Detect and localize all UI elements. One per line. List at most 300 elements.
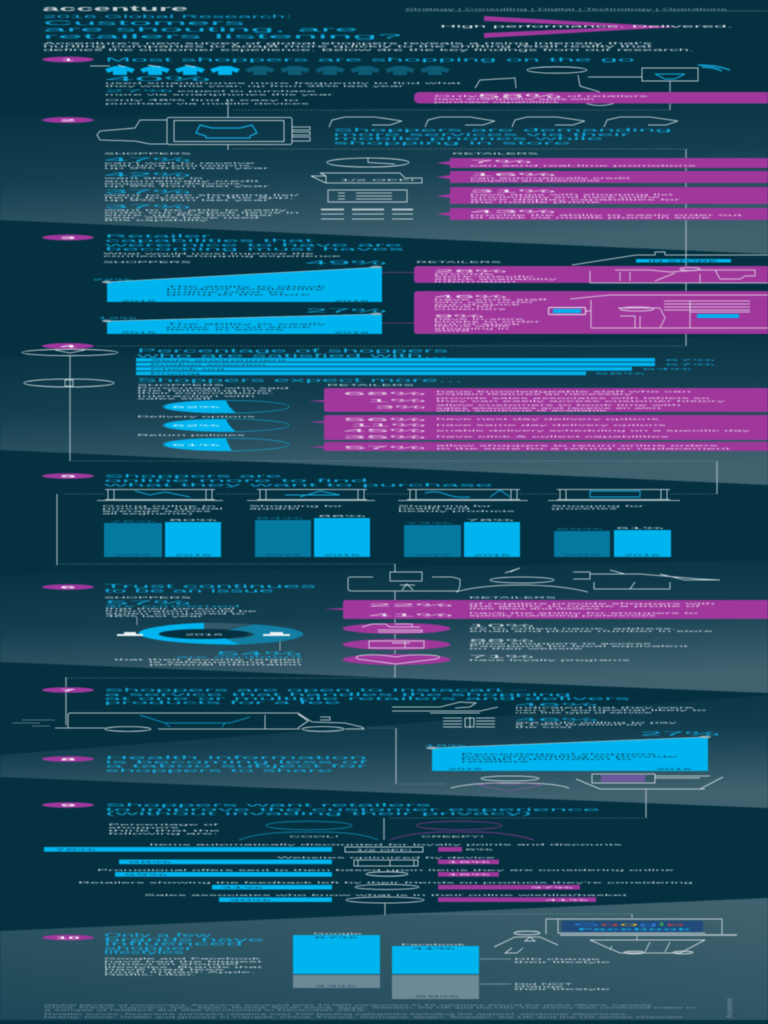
panel: section 9 [42, 802, 697, 903]
callout: delivery capability: have next day delivery options [436, 417, 662, 421]
callout: returns capability [308, 442, 768, 451]
column labels: SHOPPERS [137, 383, 225, 387]
chart row: promotional offers [97, 868, 678, 877]
chart row: friends feedback [78, 880, 697, 890]
icon: clock [327, 158, 409, 167]
heading 9: (without invading their privacy) [105, 811, 536, 816]
badge 3: 3 [60, 235, 81, 240]
intro text 9: following are: [108, 832, 219, 836]
heading 4b: Shoppers expect more... [137, 378, 466, 384]
callout: staff capability: sales associates and receive an alert [436, 406, 662, 410]
callout: staff and kiosks: 46% [434, 294, 507, 299]
chart: health information: 18% [424, 744, 468, 748]
subheading 3: connected shopping experience [103, 254, 344, 258]
chart row: discounts: Items automatically discounted for loyalty points and discounts [149, 842, 627, 846]
callout: staff capability: 68% [343, 391, 432, 397]
bar chart: google: 33% [314, 984, 360, 988]
chart: health information: who are willing to provide [461, 754, 681, 758]
callout: staff capability: allow customers to book time with [436, 403, 684, 407]
title block: 2016 Global Research: [43, 14, 292, 19]
shopper expectation intro: Return policies [137, 433, 249, 437]
chart: health information: health information to [461, 757, 635, 761]
heading 4a: who are satisfied with... [137, 353, 448, 359]
callout: staff and kiosks: out-of-stock [434, 302, 524, 306]
bar chart: online purchases: 2016 [175, 554, 215, 557]
chart row: sales associates [144, 893, 629, 903]
callout: staff and kiosks: out-of-stock [434, 322, 524, 326]
stats 7: are only willing to pay [515, 720, 681, 724]
callout: delivery capability: 35% [343, 434, 432, 440]
bar chart: satisfaction: 58% [595, 372, 648, 376]
callout: staff capability: have knowledgeable staff who can [436, 389, 695, 393]
shopper stats 2: want to be able to easily [104, 208, 292, 212]
callout: delivery capability: enable delivery scheduling on a specific day [436, 428, 753, 432]
stats: shoppers on mobile: expect to purchase [177, 89, 319, 93]
icon: dollar coins [443, 717, 495, 728]
bar chart: satisfaction: 67% [665, 362, 718, 366]
shopper stats 2: 47% [104, 158, 196, 164]
shopper concern stat: 48% last year [105, 614, 204, 618]
shopper stats 2: coupons and discounts, [104, 182, 245, 186]
heading 5: online more to find [104, 478, 370, 484]
chart: order out of stock: 27% [305, 308, 391, 314]
shopper stats 2: can't wait to receive [104, 161, 259, 165]
shopper stats 2: this capability [104, 218, 213, 222]
subheading 3 [103, 252, 344, 258]
callouts: retailer capabilities: can automatically credit [470, 176, 632, 180]
chart row: sales associates: 41% [545, 898, 592, 902]
chart row: discounts: 6% [465, 848, 497, 852]
shopper expectation intro: the following met [137, 388, 274, 392]
callout: staff and kiosks: have store staff [434, 297, 549, 301]
footer notes: a sample of retailers and was conducted in December 2015. [44, 1008, 368, 1012]
legend: lifestyle labels: change [514, 984, 565, 988]
chart: order out of stock: 2016 [334, 332, 373, 334]
stats: shoppers on mobile: purchase via mobile devices [105, 102, 312, 106]
callout: retailer smartphone apps: Only [434, 94, 482, 98]
intro text: defines the customer experience. Below are the key findings from our research. [43, 48, 694, 52]
bar chart: online purchases: 88% [318, 514, 369, 518]
heading 10: lifestyles [104, 950, 186, 956]
bar chart: online purchases: 2015 [414, 554, 454, 557]
shopper stats 2: 37% [104, 204, 196, 210]
icon: half-off tag: 1/2 OFF! [340, 178, 416, 182]
icon: person with heart [451, 776, 569, 791]
badge 8: 8 [60, 756, 81, 762]
callouts: retailer capabilities: 31% [470, 188, 556, 194]
panel: section 10 [42, 919, 737, 1019]
callout: store-specific availability: store-specific [434, 274, 539, 278]
heading 8 [105, 755, 371, 774]
shopper expectation intro: Percentage who said [137, 386, 292, 390]
stats 7: 46% [515, 702, 598, 707]
chart row: friends feedback: 37% [530, 885, 577, 889]
stats: shoppers on mobile: more via smartphones this year [105, 92, 333, 96]
shopper stats 2: 42% [104, 172, 196, 178]
chart row: websites [119, 856, 499, 866]
stats: shoppers on mobile: 40% [105, 76, 213, 83]
body text 10: have had the biggest [104, 960, 264, 964]
callouts: retailer capabilities: functionality and have online [470, 195, 663, 199]
shopper confidence stat [114, 652, 306, 666]
bar chart: google: Google [313, 932, 364, 936]
chart row: websites: 16% [447, 860, 494, 864]
body text 10: Google and Facebook [104, 956, 264, 960]
chart row: discounts: 78% [54, 848, 100, 852]
callout: staff capability: 3% [375, 404, 431, 410]
badge 9 [42, 802, 94, 808]
retailer stats 6: 10% [469, 623, 536, 628]
chart row: promotional offers: 16% [447, 872, 494, 876]
heading 2: mobile phones while [333, 136, 605, 142]
service lines: Strategy | Consulting | Digital | Technology | Operations [405, 8, 728, 12]
legend: lifestyle labels: their lifestyle [514, 960, 613, 964]
body text 10: much impact: Apple, [104, 970, 257, 974]
subheading 3: What would most improve the [103, 252, 317, 256]
callouts: retailer capabilities: of stock via mobile phone in store [470, 216, 713, 220]
body text 10 [104, 956, 264, 976]
stats: shoppers on mobile: Only 48% find it easy to [105, 98, 302, 102]
legend: lifestyle labels: DID change [514, 957, 603, 961]
column labels [103, 260, 501, 264]
labels 5: Shopping for [249, 504, 344, 508]
callout: store-specific availability [414, 266, 768, 284]
chart: delivery pie [163, 419, 289, 432]
heading 9 [105, 802, 604, 816]
bar chart: online purchases: 76% [109, 520, 159, 524]
retailer stats 6: 88% [469, 638, 536, 643]
shopper confidence stat: that their favorite retailer [114, 658, 303, 662]
icon: loyalty heart oval [342, 654, 450, 665]
shopper expectation intro: sales staff [137, 396, 213, 400]
icon: laptop with brands [546, 919, 737, 940]
heading 5: what they want to purchase [104, 482, 495, 488]
callout: staff and kiosks: 9% [434, 314, 484, 318]
bar chart: online purchases: 2016 [624, 554, 664, 557]
chart: check availability online: product availability [166, 287, 328, 291]
column labels [104, 152, 538, 156]
icon: delivery truck [12, 713, 364, 731]
bar chart: google [293, 932, 380, 988]
labels 5: health and [398, 506, 473, 510]
labels 5: Going online to [102, 504, 220, 508]
chart row: websites: 58% [128, 860, 175, 864]
callout: retailer smartphone apps: purchase capabilities [434, 100, 562, 104]
badge 10: 10 [56, 935, 84, 940]
bar chart: online purchases: 78% [466, 518, 517, 522]
chart row: sales associates: 30% [228, 898, 275, 902]
callout: staff and kiosks [414, 291, 768, 334]
footer notes [44, 1003, 697, 1019]
body text 10: lifestyles. Brands that [104, 965, 264, 969]
chart: staff pie: 62% [172, 405, 223, 409]
heading 7: at one or multiple retailers and delivers [104, 696, 636, 701]
icon: half-off tag [311, 173, 422, 183]
heading 10: shopper [104, 946, 195, 952]
shopper confidence stat: 54% [216, 652, 303, 658]
shopper stats 2: up 9% from last year [104, 166, 270, 170]
icon: four hands [329, 117, 678, 127]
chart: health information: retailers [461, 760, 533, 764]
callout: store-specific availability: 28% [434, 268, 507, 274]
chart: staff pie [163, 400, 289, 413]
callout: retailer profile ability: their likes and dislikes [469, 606, 604, 610]
callout: retailer smartphone apps: 58% [477, 94, 563, 100]
title block [43, 14, 405, 40]
badge 2: 2 [60, 118, 81, 122]
labels 5: Shopping for [398, 504, 493, 508]
chart: health information [424, 732, 724, 771]
chart row: promotional offers: 59% [124, 872, 171, 876]
stats: shoppers on mobile: they want this year, up from 36% last year [105, 84, 404, 88]
icon: laptop with brands: Facebook [578, 928, 691, 932]
badge 1 [42, 56, 94, 62]
intro text: hurtling companies to adapt more quickly to the shifting retail reality that [43, 44, 652, 48]
chart: order out of stock: The ability to easily [166, 322, 330, 326]
header bar [42, 6, 768, 13]
callout: retailer profile ability: specify marketing preferences [469, 614, 660, 618]
icon: cool person [239, 821, 378, 840]
callout: staff capability: provide sales associates with tablets so [436, 396, 713, 400]
chart: order out of stock: 12% [97, 316, 139, 320]
heading 6: Trust continues [104, 584, 319, 590]
badge 5 [42, 473, 94, 479]
callout: staff and kiosks: have in-store [434, 317, 527, 321]
icon: shirts pictogram [90, 65, 450, 75]
shopper expectation intro: their expectations: [137, 391, 276, 395]
callout: staff and kiosks: who can order [434, 300, 535, 304]
icon: in-store shopper [572, 252, 768, 283]
badge 4 [42, 343, 94, 349]
panel: section 3 [42, 234, 768, 334]
chart: trust donut: 2016 [185, 632, 226, 636]
stats: shoppers on mobile: used smartphones more frequently to find what [105, 81, 462, 85]
shopper stats 2: up 9% from last year [104, 198, 270, 202]
bar chart: online purchases: 2015 [564, 554, 604, 557]
tagline: High performance. Delivered. [440, 24, 733, 28]
stats 7: very or somewhat likely to [515, 708, 710, 712]
shopper concern stat: 57% [105, 600, 192, 606]
heading 1: Most shoppers are shopping on the go [105, 58, 636, 64]
chart: trust donut [117, 617, 303, 651]
body text 10: Netflix, Uber. [104, 972, 197, 976]
panel: section 8 [42, 732, 724, 791]
heading 2: more services via their [333, 132, 632, 138]
heading 2 [333, 128, 674, 146]
heading 5: Shoppers are [104, 474, 284, 480]
shopper stats 2: store, up 8% from last [104, 213, 274, 217]
chart: health information: 2015 [448, 768, 486, 771]
retailer stats 6 [469, 623, 717, 662]
shopper expectation intro [137, 386, 292, 437]
bar chart: online purchases: 2016 [324, 554, 364, 557]
heading 10: influenced [104, 942, 244, 948]
icon: creepy person [390, 821, 534, 840]
heading 7 [104, 688, 636, 705]
legend: lifestyle labels [480, 957, 613, 991]
retailer stats 6: 71% [469, 654, 536, 659]
heading 4a [137, 348, 451, 359]
icon: hand [392, 702, 498, 713]
stats 7: use this type of service [515, 710, 655, 714]
callout: staff capability [308, 388, 768, 412]
footer notes: beauty, home, health and grocery in Canada, China, France, Germany, Spain, Sweden, the UK and the US across channels. [44, 1015, 687, 1019]
body text 10: have had less [104, 968, 229, 972]
chart: check availability online: going to the store [166, 292, 314, 296]
badge 7 [42, 687, 94, 693]
shopper stats 2: want to use shopping list/ [104, 193, 301, 197]
bar chart: online purchases: 59% [556, 527, 606, 531]
callout: delivery capability: have click & collect capabilities [436, 434, 673, 438]
callout: delivery capability: 11% [350, 422, 432, 428]
badge 7: 7 [60, 688, 81, 692]
chart row: discounts [44, 842, 627, 852]
icon: heart device [576, 774, 723, 789]
callout: staff and kiosks: customers [434, 307, 510, 311]
callout: staff and kiosks: kiosks to order [434, 320, 541, 324]
shopper confidence stat: is safeguarding their [149, 660, 303, 664]
heading 3: Retailer [105, 234, 214, 238]
shopper confidence stat: are confident [176, 655, 304, 659]
chart: check availability online: 22% [92, 278, 134, 282]
heading 8: a taboo subject for [105, 764, 370, 770]
panel: section 7 [12, 687, 710, 784]
labels 5: Shopping for [551, 504, 645, 508]
callout: retailer profile ability: 41% [368, 612, 459, 618]
bar chart: satisfaction: 67% [665, 358, 718, 362]
chart: check availability online: 2015 [121, 300, 160, 303]
heading 9: to improve the customer experience [105, 807, 604, 812]
chart row: sales associates: Sales associates who know what is in their online wishlist/basket [144, 893, 629, 897]
callouts: retailer capabilities: 43% [470, 209, 556, 214]
callout: store-specific availability: information [434, 280, 519, 284]
shopper stats 2: item locator in the app, [104, 196, 296, 200]
labels 5: average across [102, 509, 215, 513]
shopper concern stat: stolen compared to [105, 612, 249, 616]
icon: laptop with brands: G o o g l e [573, 922, 689, 927]
callout: delivery capability: have same day delivery options [436, 423, 669, 427]
panel: section 5 [42, 473, 716, 572]
badge 2 [42, 117, 94, 123]
stats: shoppers on mobile: 27% [105, 89, 180, 93]
icon: shopping list [328, 190, 407, 202]
callout: retailer smartphone apps: have smartphone apps with [434, 97, 596, 101]
callout: retailer smartphone apps [414, 92, 768, 104]
title block: Customers [43, 20, 250, 27]
shopper stats 2: up 9% from last year [104, 184, 270, 188]
callout: retailer profile ability: of retailers provide shoppers with [469, 602, 719, 606]
callout: staff capability: explain features as necessary [436, 392, 636, 396]
retailer stats 6: have loyalty programs [469, 658, 634, 662]
intro text [43, 42, 694, 52]
heading 7: Shoppers are open to Instacart – [104, 688, 531, 692]
copyright: Accenture [725, 998, 734, 1018]
column labels [104, 596, 557, 600]
bar chart: facebook: 41% [411, 946, 459, 950]
column labels [137, 383, 415, 387]
column labels: RETAILERS [416, 260, 501, 264]
labels 5: apparel [249, 506, 301, 510]
bar chart: online purchases: 80% [169, 518, 220, 522]
shopper stats 2 [104, 158, 303, 222]
chart: order out of stock: order out-of-stock [166, 325, 315, 329]
bar chart: facebook [392, 942, 479, 999]
shopper stats 2: want ability to [104, 176, 206, 180]
footer notes: China, France, Germany, Italy, Japan, Russia, South Africa, Spain, Sweden, the UK and the US). The survey was conducted online in [44, 1006, 697, 1010]
badge 8 [42, 756, 94, 762]
icon: hand holding phone [97, 100, 310, 150]
icon: facebook oval [342, 639, 450, 650]
retailer stats 6: try to collect name, address, [469, 626, 678, 630]
shopper stats 2: real-time promotions, [104, 164, 257, 168]
logo: accenture: accenture [42, 6, 188, 13]
chart row: websites: Websites optimized by device [277, 856, 499, 860]
icon: person with phone [475, 65, 730, 110]
heading 4a: Percentage of shoppers [137, 348, 451, 354]
labels 5: groceries [551, 506, 621, 510]
callout: returns capability: allow shoppers to return online orders [436, 443, 723, 447]
heading 8: is becoming less of [105, 759, 371, 765]
retailer stats 6: on their website [469, 646, 586, 650]
chart row: friends feedback: 31% [220, 885, 267, 889]
legend: lifestyle labels: their lifestyle [514, 987, 613, 991]
callout: store-specific availability: provide [434, 272, 498, 276]
badge 5: 5 [60, 474, 81, 478]
chart: returns pie [163, 438, 289, 451]
icon: person and timeline [22, 349, 118, 461]
callouts: retailer capabilities: can send real-time promotions [470, 163, 700, 167]
bar chart: online purchases: 61% [616, 526, 667, 530]
chart: health information: 27% [640, 732, 724, 738]
intro text 9: think that the [108, 828, 222, 832]
icon: profile oval [342, 623, 450, 634]
heading 2: Shoppers are demanding [333, 128, 674, 134]
footer notes: Global sample of consumers: Accenture surveyed over 10,000 consumers in 12 countries around the globe (Brazil, Canada, [44, 1003, 655, 1007]
callouts: retailer capabilities: provide the ability to easily order out [470, 213, 744, 217]
heading 7: products for a fee [104, 700, 345, 705]
callout: returns capability: 57% [343, 445, 432, 451]
heading 7: a service that handles the shopping [104, 692, 575, 697]
bar chart: online purchases [104, 514, 671, 557]
column labels: SHOPPERS [103, 260, 191, 264]
shopper expectation intro: Interaction with [137, 394, 259, 398]
heading 10 [104, 933, 265, 956]
shopper stats 2: automatically credit [104, 179, 261, 183]
icon: in-store shopper: IN STORE [648, 259, 719, 263]
callouts: retailer capabilities: coupons and discounts [470, 178, 603, 182]
bar chart: facebook: Facebook [401, 942, 468, 946]
heading 10: brands have [104, 938, 265, 944]
shopper expectation intro: Delivery options [137, 414, 259, 418]
intro text 9: Percentage of [108, 822, 219, 826]
stats 7: indicated that they were [515, 706, 698, 710]
heading 8: Health information [105, 755, 369, 761]
callout: staff capability: when someone is available [436, 408, 610, 412]
intro text 9: shoppers [108, 826, 182, 830]
icon: person with cart [494, 931, 705, 954]
shopper stats 2: order out-of-stock items in [104, 210, 303, 214]
icon: padlock person and mail [348, 568, 720, 600]
body text 10: impact on shopper [104, 962, 241, 966]
legend: lifestyle labels: Did NOT [514, 982, 575, 986]
callout: delivery capability [308, 415, 768, 440]
badge 1: 1 [62, 57, 78, 62]
icon: laptops [97, 490, 680, 500]
badge 3 [42, 234, 94, 240]
bar chart: satisfaction: Check out [150, 367, 226, 371]
retailer stats 6: email and phone number in store [469, 629, 717, 633]
callout: retailer profile ability [323, 600, 768, 619]
